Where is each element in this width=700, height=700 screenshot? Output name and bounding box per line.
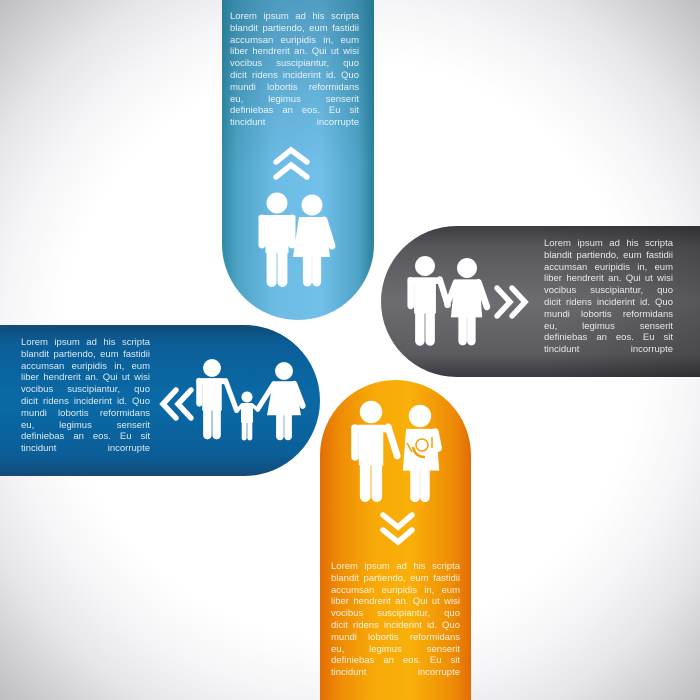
text block: left panel: eu, legimus senserit	[21, 420, 150, 431]
text block: bottom panel: definiebas an eos. Eu sit	[331, 655, 460, 666]
text block: right panel: blandit partiendo, eum fastidii	[544, 250, 673, 261]
text block: bottom panel: mundi lobortis reformidans	[331, 632, 460, 643]
text block: left panel: mundi lobortis reformidans	[21, 408, 150, 419]
text block: bottom panel	[331, 561, 460, 678]
text block: top panel: eu, legimus senserit	[230, 94, 359, 105]
text block: left panel: Lorem ipsum ad his scripta	[21, 337, 150, 348]
panel: blue top pill	[222, 0, 374, 320]
icon: family with child	[196, 359, 303, 438]
text block: right panel: accumsan euripidis in, eum	[544, 262, 673, 273]
icon: couple with baby	[351, 401, 439, 497]
text block: top panel: mundi lobortis reformidans	[230, 82, 359, 93]
text block: top panel	[230, 11, 360, 128]
text block: bottom panel: accumsan euripidis in, eum	[331, 585, 460, 596]
text block: right panel: eu, legimus senserit	[544, 321, 673, 332]
text block: bottom panel: Lorem ipsum ad his scripta	[331, 561, 460, 572]
text block: top panel: definiebas an eos. Eu sit	[230, 105, 359, 116]
text block: right panel: definiebas an eos. Eu sit	[544, 332, 673, 343]
icon: couple	[258, 192, 332, 282]
text block: bottom panel: eu, legimus senserit	[331, 644, 460, 655]
text block: top panel: accumsan euripidis in, eum	[230, 35, 359, 46]
text block: right panel: vocibus suscipiantur, quo	[544, 285, 673, 296]
text block: right panel: tincidunt incorrupte	[544, 344, 673, 355]
text block: top panel: tincidunt incorrupte	[230, 117, 359, 128]
text block: top panel: vocibus suscipiantur, quo	[230, 58, 359, 69]
icon: baby	[407, 437, 432, 457]
text block: left panel: dicit ridens inciderint id. Quo	[21, 396, 150, 407]
text block: left panel: liber hendrerit an. Qui ut wisi	[21, 372, 150, 383]
text block: left panel: vocibus suscipiantur, quo	[21, 384, 150, 395]
panel: orange bottom pill	[320, 380, 471, 700]
text block: right panel: Lorem ipsum ad his scripta	[544, 238, 673, 249]
icon: up chevrons	[276, 150, 307, 177]
icon: couple	[407, 256, 487, 341]
text block: right panel: liber hendrerit an. Qui ut wisi	[544, 273, 673, 284]
text block: left panel	[21, 337, 150, 454]
text block: left panel: accumsan euripidis in, eum	[21, 361, 150, 372]
icon: right chevrons	[497, 288, 525, 316]
panel: dark blue left pill	[0, 325, 320, 476]
text block: left panel: definiebas an eos. Eu sit	[21, 431, 150, 442]
text block: bottom panel: dicit ridens inciderint id. Quo	[331, 620, 460, 631]
text block: left panel: blandit partiendo, eum fastidii	[21, 349, 150, 360]
text block: bottom panel: vocibus suscipiantur, quo	[331, 608, 460, 619]
text block: bottom panel: liber hendrerit an. Qui ut wisi	[331, 596, 460, 607]
text block: bottom panel: blandit partiendo, eum fastidii	[331, 573, 460, 584]
text block: right panel: mundi lobortis reformidans	[544, 309, 673, 320]
icon: down chevrons	[383, 515, 412, 542]
text block: right panel	[544, 238, 674, 355]
text block: top panel: liber hendrerit an. Qui ut wisi	[230, 46, 359, 57]
text block: top panel: dicit ridens inciderint id. Quo	[230, 70, 359, 81]
text block: top panel: Lorem ipsum ad his scripta	[230, 11, 359, 22]
text block: top panel: blandit partiendo, eum fastidii	[230, 23, 359, 34]
panel: grey right pill	[381, 226, 700, 377]
text block: left panel: tincidunt incorrupte	[21, 443, 150, 454]
text block: bottom panel: tincidunt incorrupte	[331, 667, 460, 678]
text block: right panel: dicit ridens inciderint id. Quo	[544, 297, 673, 308]
icon: left chevrons	[163, 390, 191, 418]
